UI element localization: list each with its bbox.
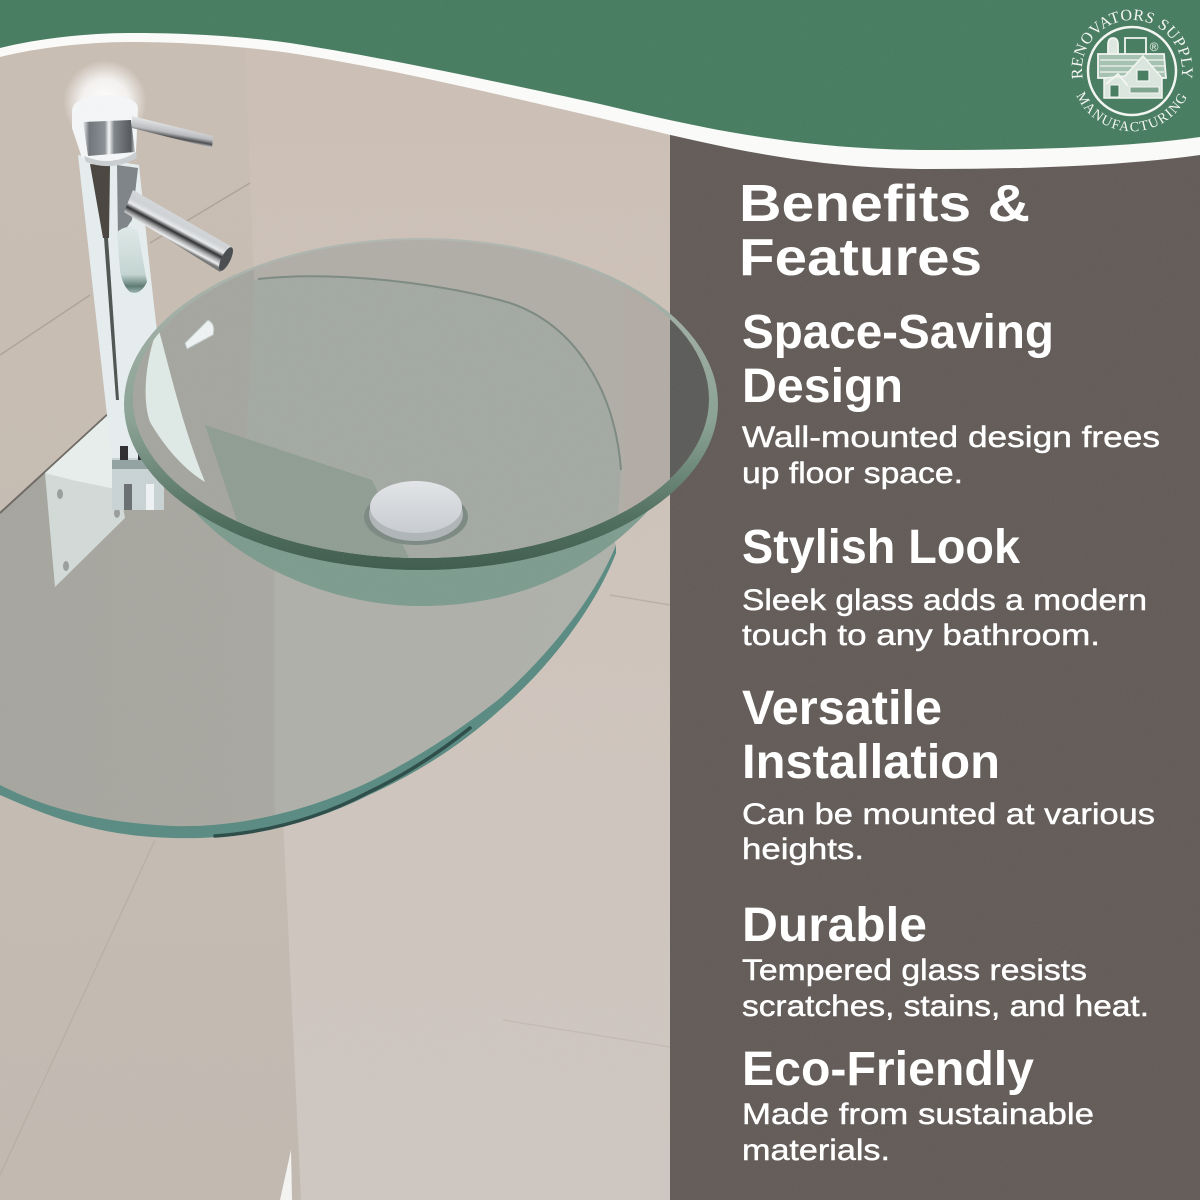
white spike at bottom of wall [280, 1150, 292, 1200]
feature: eco-friendly [742, 1043, 1094, 1167]
stylish body: touch to any bathroom. [742, 619, 1100, 652]
sink bowl underside [150, 440, 680, 606]
logo house [1098, 38, 1166, 98]
faucet column [78, 155, 158, 460]
eco-friendly body [742, 1098, 1094, 1167]
eco-friendly body: Made from sustainable [742, 1098, 1094, 1131]
shelf edge [0, 545, 616, 838]
main heading: Benefits & [739, 175, 1030, 233]
mounting bracket [45, 416, 125, 587]
faucet base [112, 446, 164, 510]
panel: benefits background [670, 120, 1200, 1200]
drain [364, 481, 468, 545]
column reflections [90, 164, 147, 400]
space-saving heading [742, 306, 1054, 413]
feature: versatile installation [742, 682, 1155, 866]
eco-friendly body: materials. [742, 1134, 890, 1167]
stylish heading: Stylish Look [742, 521, 1020, 574]
durable body: scratches, stains, and heat. [742, 990, 1149, 1023]
space-saving body: up floor space. [742, 457, 963, 490]
shelf wall junction [0, 415, 107, 513]
eco-friendly heading: Eco-Friendly [742, 1043, 1034, 1096]
faucet glow [63, 60, 147, 144]
versatile body: Can be mounted at various [742, 798, 1155, 831]
space-saving body [742, 421, 1160, 490]
faucet spout [124, 190, 232, 272]
faucet head [72, 95, 138, 161]
benefits text [739, 175, 1160, 1167]
glass sink [124, 230, 730, 606]
stylish body [742, 584, 1147, 652]
durable body [742, 954, 1149, 1023]
durable body: Tempered glass resists [742, 954, 1087, 987]
logo: Renovators Supply Manufacturing [1072, 9, 1193, 132]
sink interior [133, 240, 709, 558]
versatile body: heights. [742, 833, 864, 866]
logo registered mark: ® [1150, 40, 1159, 54]
glass shelf [0, 413, 616, 838]
logo text top: RENOVATORS SUPPLY [1072, 9, 1193, 79]
feature: stylish look [742, 521, 1147, 652]
clip tab [185, 320, 214, 349]
versatile heading: Versatile [742, 682, 942, 735]
faucet [63, 60, 236, 510]
basin inner wall [240, 276, 621, 565]
feature: durable [742, 899, 1149, 1023]
sink rim [124, 238, 718, 570]
durable heading: Durable [742, 899, 927, 952]
faucet handle [132, 116, 213, 148]
logo text bottom: MANUFACTURING [1076, 91, 1186, 132]
space-saving heading: Space-Saving [742, 306, 1054, 359]
main heading: Features [739, 229, 982, 287]
wave header [0, 0, 1200, 169]
stylish body: Sleek glass adds a modern [742, 584, 1147, 617]
main heading [739, 175, 1030, 287]
basin shadow [205, 425, 410, 560]
versatile heading [742, 682, 1000, 789]
feature: space-saving design [742, 306, 1160, 490]
versatile heading: Installation [742, 736, 1000, 789]
versatile body [742, 798, 1155, 866]
space-saving heading: Design [742, 360, 903, 413]
faucet seen through glass [146, 327, 205, 482]
space-saving body: Wall-mounted design frees [742, 421, 1160, 454]
